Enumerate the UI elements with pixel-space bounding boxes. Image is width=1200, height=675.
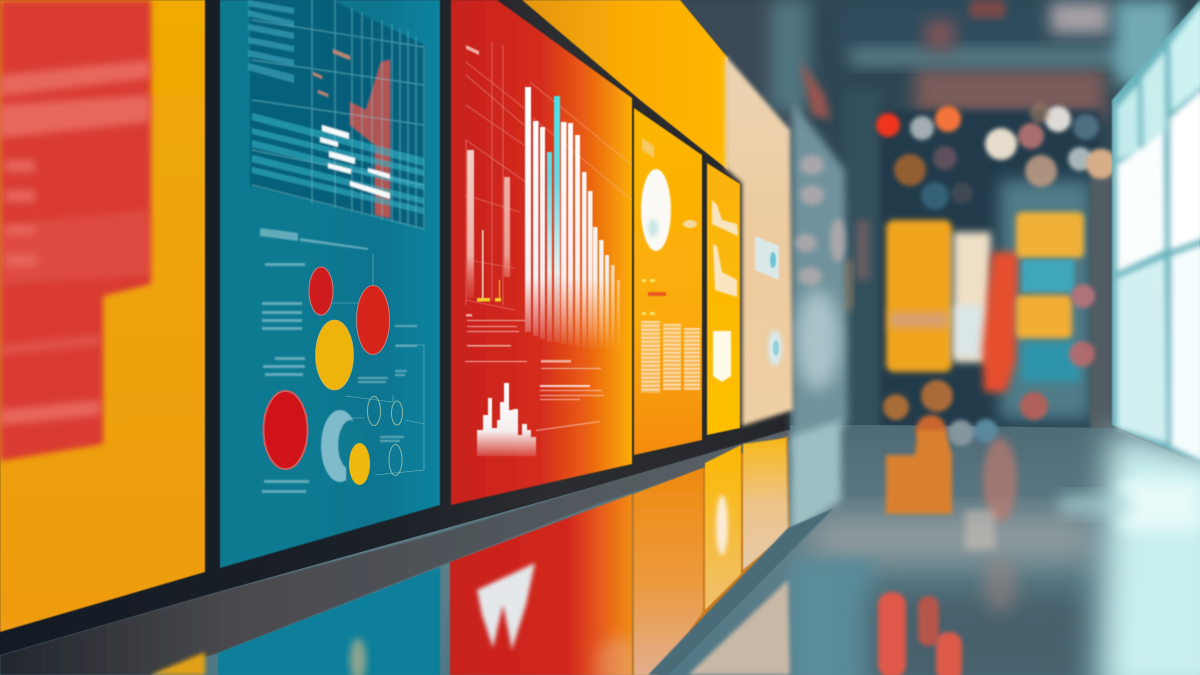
far panel: yellow and teal blocks — [1016, 212, 1084, 258]
right glowing windows — [1112, 0, 1200, 462]
floor: teal left — [790, 560, 875, 675]
floor: pale band — [810, 515, 1090, 560]
chart: grid with horizontal bars — [248, 0, 425, 229]
panel: yellow narrow display — [707, 163, 740, 435]
floor — [0, 425, 1200, 675]
chart: thin lines and pale bars — [465, 42, 632, 310]
red block — [0, 0, 151, 461]
floor: bright right side — [1100, 432, 1200, 675]
far panel: cream — [953, 232, 991, 362]
far blurred displays — [886, 212, 1084, 392]
wall backing — [0, 0, 790, 655]
white oval — [641, 169, 671, 251]
white bars — [320, 125, 390, 199]
shape: lower chart — [713, 244, 737, 297]
circle: yellow — [316, 320, 354, 390]
upper cream display — [725, 55, 793, 426]
reflection: mid wall — [791, 420, 841, 535]
reflection: red lights — [878, 592, 906, 675]
reflection: yellow left — [150, 652, 205, 675]
far panel: red stripe — [982, 252, 1018, 392]
circle: large red upper — [356, 286, 390, 354]
yellow base ticks — [477, 298, 490, 302]
reflection: orange — [634, 468, 703, 675]
reflection: teal — [218, 567, 440, 675]
reflection: histogram white — [477, 563, 535, 650]
blurred text lines — [0, 60, 150, 425]
lower stripes — [252, 113, 424, 214]
chart: tall white bars — [525, 87, 620, 353]
circle: large red lower — [264, 391, 308, 469]
reflection: far orange block — [886, 430, 952, 514]
floor seam — [648, 508, 834, 675]
reflection: cream and yellow — [743, 438, 788, 570]
bokeh lights — [876, 103, 1116, 446]
reflection: pale patch — [965, 510, 995, 550]
chart: mini histogram — [477, 383, 536, 456]
panel: upper yellow band — [522, 0, 793, 426]
blurred mid-wall panel — [792, 60, 870, 452]
reflection: cream lower — [688, 580, 790, 675]
floor concrete ledge — [0, 430, 790, 675]
far panel: orange — [886, 220, 952, 372]
white block — [713, 331, 731, 382]
reflection: yellow — [705, 445, 741, 610]
floor reflections — [150, 420, 1018, 675]
panel: red-to-orange display — [451, 0, 632, 505]
shape: upper chart — [712, 200, 738, 236]
circle: small yellow — [349, 443, 370, 485]
reflection: red — [450, 494, 632, 675]
floor: dark centre — [870, 590, 1090, 675]
text block columns — [641, 321, 700, 393]
outline circles — [368, 396, 402, 476]
reflection: backing — [632, 436, 790, 675]
small marks — [642, 279, 666, 315]
panel: teal display — [220, 0, 440, 568]
panel: left red and yellow display — [0, 0, 205, 632]
left stripe list — [248, 0, 294, 83]
cream display highlights — [755, 236, 779, 280]
red chart — [350, 60, 390, 218]
icon: ring arc — [321, 410, 364, 484]
blurred text lines — [260, 228, 417, 493]
circle: small red — [309, 267, 333, 315]
panel: orange narrow display — [634, 108, 702, 455]
reflection: far red — [983, 438, 1017, 522]
small text lines — [465, 45, 604, 431]
